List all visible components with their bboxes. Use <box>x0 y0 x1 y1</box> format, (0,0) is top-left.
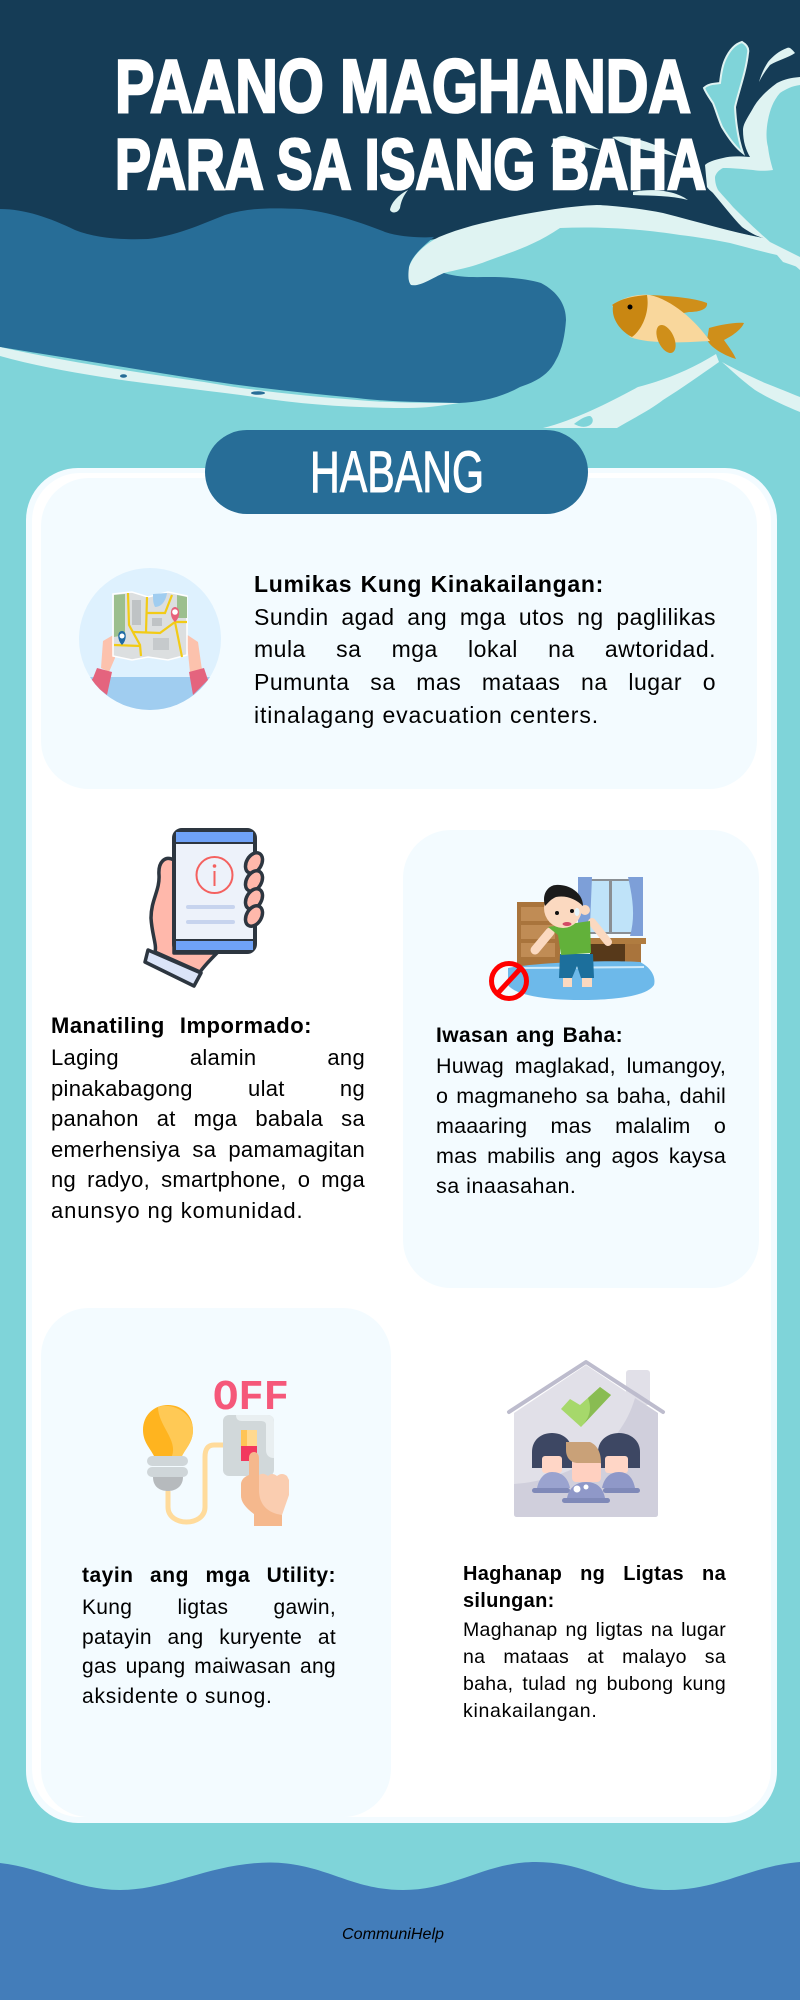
text: evacuation instructions <box>254 604 716 728</box>
header: dark sky <box>0 0 800 270</box>
text: stay informed instructions: Laging alamin ang <box>51 1045 365 1070</box>
text: stay informed instructions: panahon at mga babala sa <box>51 1106 365 1131</box>
header: lower foam streak <box>0 347 459 408</box>
icon: family safe in house with check mark <box>507 1360 665 1517</box>
text: evacuation instructions: Pumunta sa mas mataas na lugar o <box>254 669 716 695</box>
text: stay informed instructions: emerhensiya sa pamamagitan <box>51 1137 365 1162</box>
text: evacuation instructions: itinalagang evacuation centers. <box>254 702 599 728</box>
text: avoid flood instructions: mas mabilis ang agos kaysa <box>436 1144 726 1168</box>
icon: hands holding map <box>79 568 221 710</box>
icon: golden fish <box>612 295 744 359</box>
text: utilities instructions: Kung ligtas gawin, <box>82 1596 336 1619</box>
header: foam droplets behind title <box>390 136 688 212</box>
heading: Haghanap ng Ligtas na silungan: silungan: <box>463 1590 555 1612</box>
text: avoid flood instructions: sa inaasahan. <box>436 1174 576 1198</box>
icon: light bulb with off switch <box>143 1373 289 1526</box>
heading pill: HABANG <box>205 430 588 514</box>
text: safe shelter instructions: kinakailangan. <box>463 1700 597 1722</box>
text: utilities instructions: patayin ang kuryente at <box>82 1626 336 1649</box>
panel: Manatiling Impormado <box>51 828 365 1223</box>
title <box>115 44 706 205</box>
header: splash foam <box>704 42 800 270</box>
footer: blue wave <box>0 1862 800 2000</box>
text: safe shelter instructions: Maghanap ng ligtas na lugar <box>463 1619 726 1641</box>
heading: Lumikas Kung Kinakailangan: Lumikas Kung Kinakailangan: <box>254 571 604 597</box>
text: utilities instructions: aksidente o sunog. <box>82 1685 273 1708</box>
heading: tayin ang mga Utility: tayin ang mga Utility: <box>82 1564 336 1587</box>
header: main wave crest foam <box>408 205 800 286</box>
text: stay informed instructions <box>51 1045 365 1223</box>
text: stay informed instructions: pinakabagong ulat ng <box>51 1076 365 1101</box>
text: stay informed instructions: anunsyo ng komunidad. <box>51 1198 304 1223</box>
footer credit: CommuniHelp: CommuniHelp <box>342 1926 444 1943</box>
text: safe shelter instructions: na mataas at malayo sa <box>463 1646 726 1668</box>
heading: Haghanap ng Ligtas na silungan <box>463 1563 726 1612</box>
panel: main white card <box>26 468 777 1823</box>
heading pill: HABANG: HABANG <box>310 440 484 505</box>
icon: boy standing in flood water with prohibition sign <box>489 877 654 1001</box>
text: avoid flood instructions <box>436 1054 726 1198</box>
heading: Iwasan ang Baha: Iwasan ang Baha: <box>436 1024 623 1046</box>
text: utilities instructions <box>82 1596 336 1708</box>
text: safe shelter instructions: baha, tulad ng bubong kung <box>463 1673 726 1695</box>
heading: Haghanap ng Ligtas na silungan: Haghanap ng Ligtas na <box>463 1563 726 1585</box>
panel: Lumikas Kung Kinakailangan <box>41 478 757 789</box>
header: right foam wedge <box>543 354 800 428</box>
text: evacuation instructions: Sundin agad ang mga utos ng paglilikas <box>254 604 716 630</box>
text: stay informed instructions: ng radyo, smartphone, o mga <box>51 1167 365 1192</box>
text: avoid flood instructions: o magmaneho sa baha, dahil <box>436 1084 726 1108</box>
text: utilities instructions: gas upang maiwasan ang <box>82 1655 336 1678</box>
text: avoid flood instructions: maaaring mas malalim o <box>436 1114 726 1138</box>
heading: Manatiling Impormado: Manatiling Impormado: <box>51 1013 312 1038</box>
icon: light bulb with off switch: OFF <box>213 1373 289 1422</box>
text: evacuation instructions: mula sa mga lokal na awtoridad. <box>254 636 716 662</box>
panel: Haghanap ng Ligtas na silungan <box>463 1360 726 1722</box>
text: avoid flood instructions: Huwag maglakad, lumangoy, <box>436 1054 726 1078</box>
header: deep blue wave <box>0 208 566 403</box>
text: safe shelter instructions <box>463 1619 726 1722</box>
panel: Patayin ang mga Utility <box>41 1308 391 1817</box>
icon: hand holding phone with info alert <box>143 828 264 988</box>
panel: Iwasan ang Baha <box>403 830 759 1288</box>
